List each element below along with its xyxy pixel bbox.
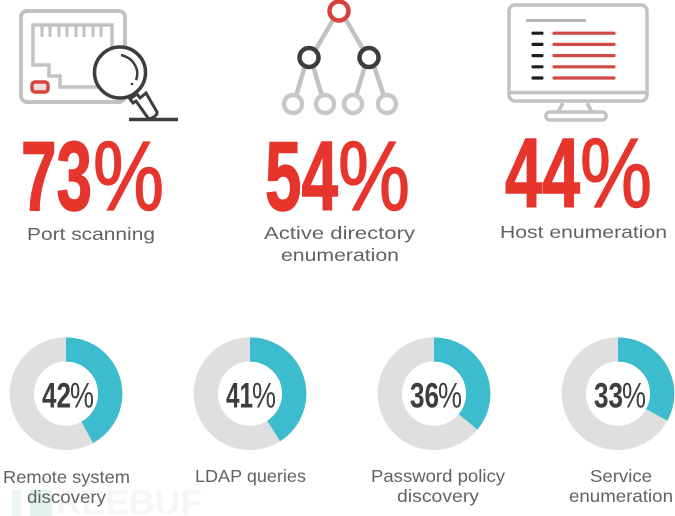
- stat: 44% host enumeration: 44: [505, 118, 580, 228]
- stat: 54% active directory enumeration: Active directory: [264, 223, 415, 243]
- stat: 44% host enumeration: %: [580, 118, 652, 228]
- icon: monitor with list: [509, 5, 647, 120]
- donut: 41% LDAP queries: %: [252, 376, 276, 416]
- donut: 36% password policy discovery: Password policy: [371, 466, 505, 486]
- icon: network port with magnifier: [21, 11, 178, 120]
- stat: 73% port scanning: [21, 121, 164, 244]
- stat: 73% port scanning: 73: [21, 121, 92, 231]
- donut: 33% service enumeration: Service: [590, 466, 652, 486]
- stat: 54% active directory enumeration: enumeration: [281, 245, 399, 265]
- donut: 36% password policy discovery: 36: [410, 376, 439, 416]
- donut: 41% LDAP queries: [195, 350, 306, 486]
- donut: 33% service enumeration: [569, 350, 673, 506]
- stat: 73% port scanning: Port scanning: [27, 224, 155, 244]
- stat: 44% host enumeration: [500, 118, 667, 242]
- donut: 33% service enumeration: %: [622, 376, 646, 416]
- donut: 42% remote system discovery: %: [70, 376, 94, 416]
- donut: 42% remote system discovery: 42: [42, 376, 71, 416]
- icon: hierarchy tree: [284, 2, 396, 113]
- stat: 73% port scanning: %: [93, 121, 164, 231]
- stat: 44% host enumeration: Host enumeration: [500, 222, 667, 242]
- donut: 42% remote system discovery: Remote system: [3, 467, 130, 487]
- donut: 41% LDAP queries: LDAP queries: [195, 466, 306, 486]
- donut: 42% remote system discovery: discovery: [27, 487, 106, 507]
- stat: 54% active directory enumeration: [264, 121, 415, 265]
- donut: 33% service enumeration: 33: [594, 376, 623, 416]
- donut: 41% LDAP queries: 41: [226, 376, 253, 416]
- stat: 54% active directory enumeration: %: [338, 121, 410, 231]
- donut: 36% password policy discovery: [371, 350, 505, 506]
- donut: 36% password policy discovery: discovery: [397, 486, 479, 506]
- donut: 33% service enumeration: enumeration: [569, 486, 673, 506]
- donut: 42% remote system discovery: [3, 350, 130, 507]
- donut: 36% password policy discovery: %: [438, 376, 462, 416]
- stat: 54% active directory enumeration: 54: [265, 121, 338, 231]
